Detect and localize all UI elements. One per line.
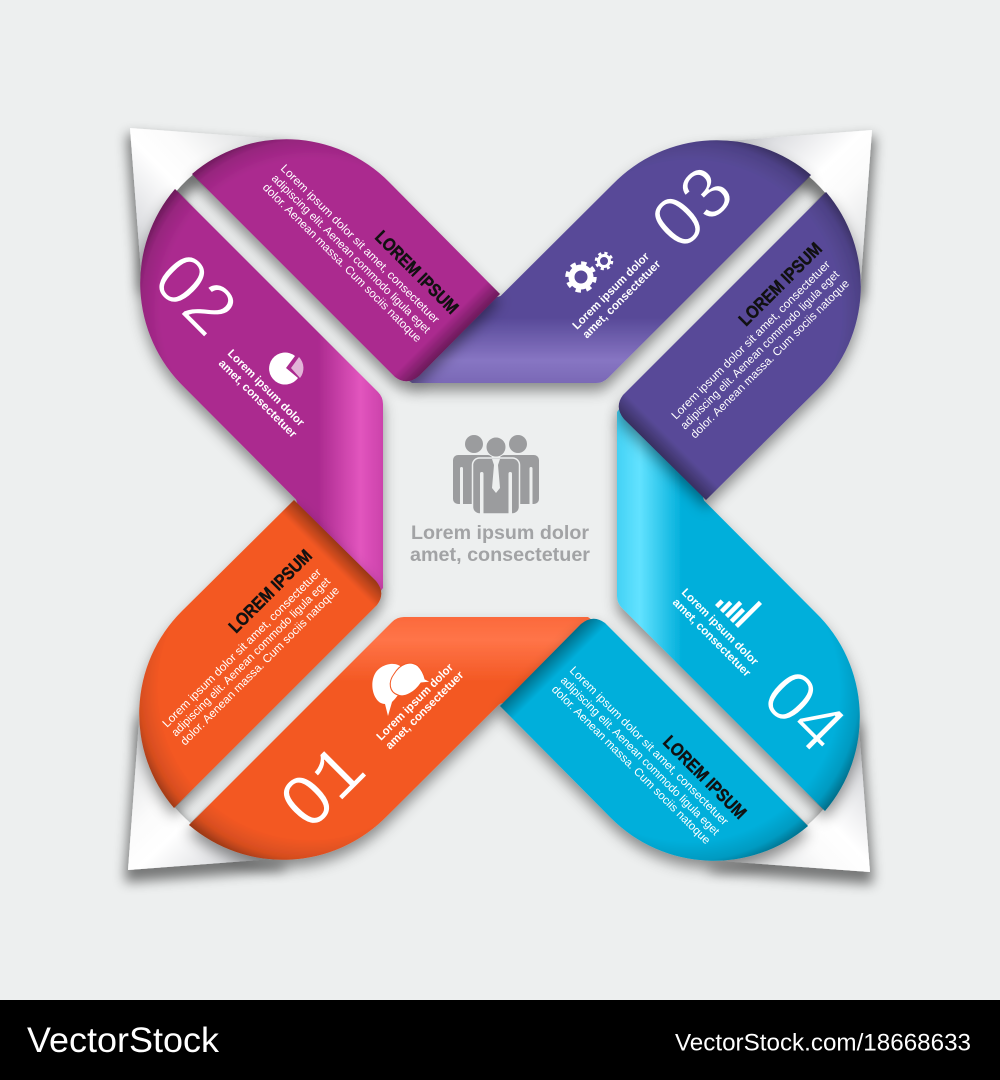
icon: people group	[453, 435, 539, 516]
body text: dolor. Aenean massa. Cum sociis natoque	[179, 585, 342, 748]
label 01: Lorem ipsum dolor	[375, 661, 456, 743]
center caption: Lorem ipsum dolor	[411, 523, 590, 544]
number 02: 02	[139, 238, 252, 351]
panel: strip 02 magenta	[139, 189, 383, 592]
label 01: amet, consectetuer	[384, 669, 467, 752]
footer bar	[0, 1000, 1000, 1080]
heading: LOREM IPSUM	[735, 239, 826, 330]
body text: adipiscing elit. Aenean commodo ligula eget	[170, 575, 334, 739]
label 03: Lorem ipsum dolor	[571, 250, 652, 332]
body text: Lorem ipsum dolor sit amet, consectetuer	[670, 259, 833, 422]
heading: LOREM IPSUM	[659, 732, 750, 823]
panel: text panel orange	[139, 500, 381, 808]
body text: adipiscing elit. Aenean commodo ligula eget	[679, 268, 843, 432]
footer url: VectorStock.com/18668633	[675, 1030, 971, 1056]
panel: strip 04 cyan	[617, 408, 861, 811]
panel: text panel cyan	[500, 619, 808, 861]
center caption: amet, consectetuer	[410, 545, 591, 566]
label 03: amet, consectetuer	[581, 258, 664, 341]
footer logo: VectorStock	[27, 1021, 220, 1060]
label 04: Lorem ipsum dolor	[679, 587, 761, 668]
icon: pie chart	[269, 353, 303, 385]
body text: dolor. Aenean massa. Cum sociis natoque	[689, 278, 852, 441]
panel: text panel magenta	[192, 139, 500, 381]
label 02: amet, consectetuer	[216, 358, 299, 441]
center caption	[410, 523, 591, 566]
number 04: 04	[748, 655, 861, 768]
body text: dolor. Aenean massa. Cum sociis natoque	[260, 182, 423, 345]
paper corner: top left	[130, 128, 293, 285]
number 03: 03	[636, 151, 749, 264]
panel: strip 01 orange	[189, 617, 592, 860]
icon: bar chart	[715, 581, 762, 628]
body text: adipiscing elit. Aenean commodo ligula eget	[558, 675, 722, 839]
body text: Lorem ipsum dolor sit amet, consectetuer	[278, 163, 441, 326]
body text: adipiscing elit. Aenean commodo ligula eget	[269, 173, 433, 337]
label 02: Lorem ipsum dolor	[225, 348, 307, 429]
label 04: amet, consectetuer	[670, 597, 753, 680]
panel: strip 03 violet	[408, 140, 811, 383]
number 01: 01	[265, 728, 384, 848]
body text: dolor. Aenean massa. Cum sociis natoque	[549, 684, 712, 847]
icon: speech bubbles	[372, 663, 431, 716]
paper corner: bottom left	[128, 707, 285, 870]
paper corner: bottom right	[707, 715, 870, 872]
icon: gears	[567, 253, 612, 291]
body text: Lorem ipsum dolor sit amet, consectetuer	[567, 665, 730, 828]
body text: Lorem ipsum dolor sit amet, consectetuer	[161, 567, 324, 730]
heading: LOREM IPSUM	[371, 227, 462, 318]
panel: text panel violet	[619, 192, 861, 500]
paper corner: top right	[715, 130, 872, 293]
heading: LOREM IPSUM	[225, 546, 316, 637]
